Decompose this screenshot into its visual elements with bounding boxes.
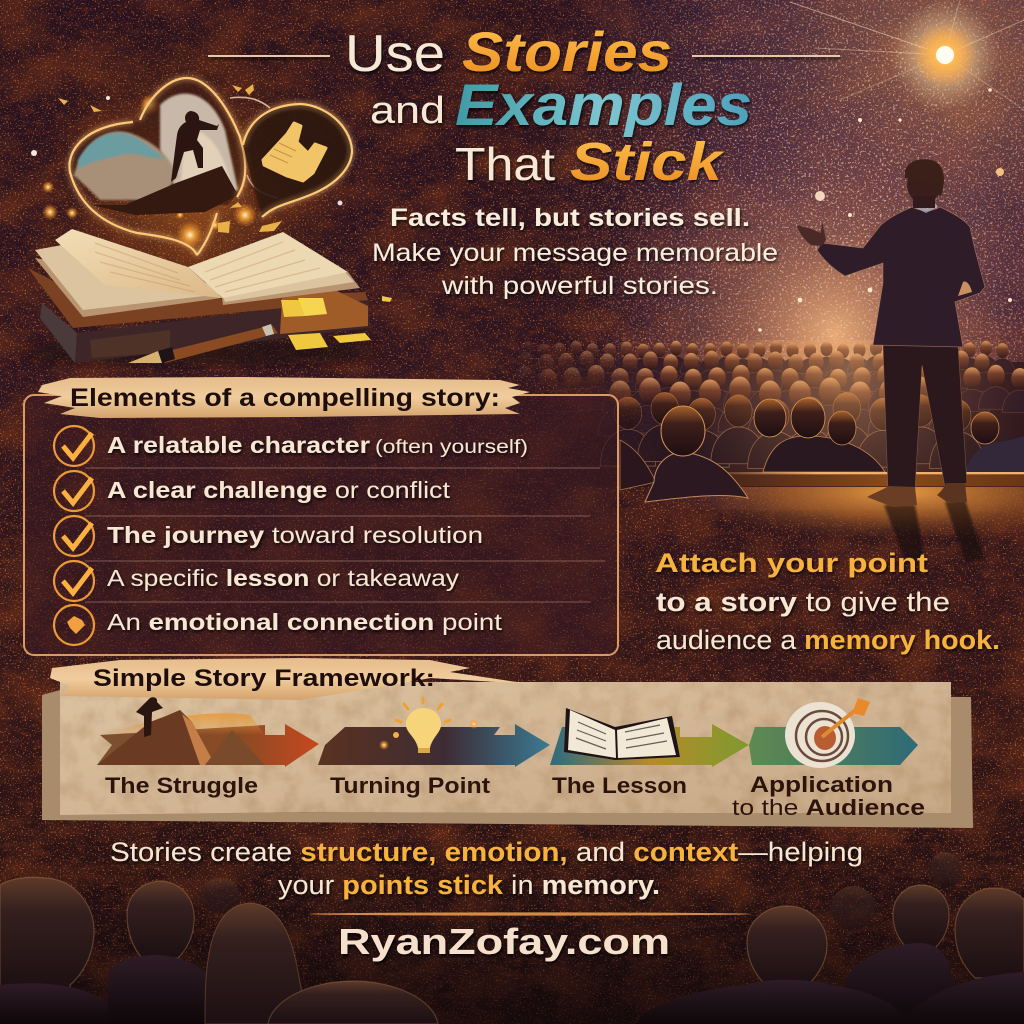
icon: thumbs up [263,123,326,181]
head [907,164,941,204]
panel: elements of a compelling story [24,377,618,655]
subtitle: Make your message memorable [372,239,778,267]
panel heading brush [38,377,530,418]
icon: open book [564,708,680,760]
side callout [655,548,1000,655]
spotlight sun with rays [758,0,1024,332]
jacket and arm [817,207,985,347]
list text: A specific lesson or takeaway [107,565,460,591]
website rule [308,912,752,916]
list text: (often yourself) [375,437,528,458]
nearest audience members [763,436,885,472]
step 4: application: Application [750,772,893,797]
sticky notes [281,296,392,350]
step 4: application: to the Audience [732,795,925,820]
step 1: the struggle: The Struggle [105,773,258,798]
list text: A clear challenge or conflict [107,477,451,503]
closing statement: Stories create structure, emotion, and context —helping [110,837,863,867]
story character [171,111,219,182]
row dividers [85,468,605,602]
check icons [54,426,94,645]
pen [128,324,278,363]
audience crowd behind speaker [482,340,1024,487]
title [208,20,840,192]
panel: simple story framework [42,658,973,828]
list text [107,432,528,635]
hand [797,221,826,246]
icon: target with arrow [785,698,870,768]
title rule left [208,55,330,57]
step 2: turning point [318,698,550,798]
list text: An emotional connection point [107,609,503,635]
side callout: to a story to give the [656,587,950,617]
story scene bubble [72,78,245,205]
step 3: the lesson [550,708,749,798]
book illustration with story bubbles [20,78,392,366]
distant heads [200,852,961,930]
thumbs up bubble [243,104,352,217]
subtitle: Facts tell, but stories sell. [390,204,750,232]
second audience member [108,881,207,1024]
step 2: turning point: Turning Point [330,773,491,798]
glowing heart outline [69,78,245,255]
list text: A relatable character [107,432,370,458]
framework heading brush [50,658,530,700]
stage floor [620,472,1024,560]
title: Examples [455,73,752,138]
side callout: Attach your point [655,548,928,578]
sparkles around book [31,84,342,249]
speaker silhouette [797,159,985,507]
subtitle: with powerful stories. [441,272,718,300]
website: RyanZofay.com [338,921,670,962]
title: Use [345,25,445,83]
front row audience at stage edge [620,406,748,502]
step 4: application [732,698,925,820]
title: Stories [462,20,672,83]
foreground audience silhouettes [0,850,1024,1024]
list text: The journey toward resolution [107,522,483,548]
closing statement [110,837,863,900]
trousers [883,345,967,490]
shoes [867,486,917,507]
subtitle [372,204,778,300]
title: and [370,90,445,132]
third audience member with long hair [205,903,303,1024]
side callout: audience a memory hook. [656,625,1000,655]
left audience member [0,877,222,1024]
step 1: the struggle [97,697,319,798]
title: Stick [570,132,725,192]
panel heading: Elements of a compelling story: [70,384,500,412]
title: That [455,138,555,190]
closing statement: your points stick in memory. [278,870,660,900]
title rule right [692,55,840,57]
framework heading: Simple Story Framework: [93,665,435,692]
book [20,229,380,366]
icon: light bulb [379,698,479,753]
step 3: the lesson: The Lesson [552,773,687,798]
right audience members [636,885,1024,1024]
bottom centre head [268,981,438,1024]
